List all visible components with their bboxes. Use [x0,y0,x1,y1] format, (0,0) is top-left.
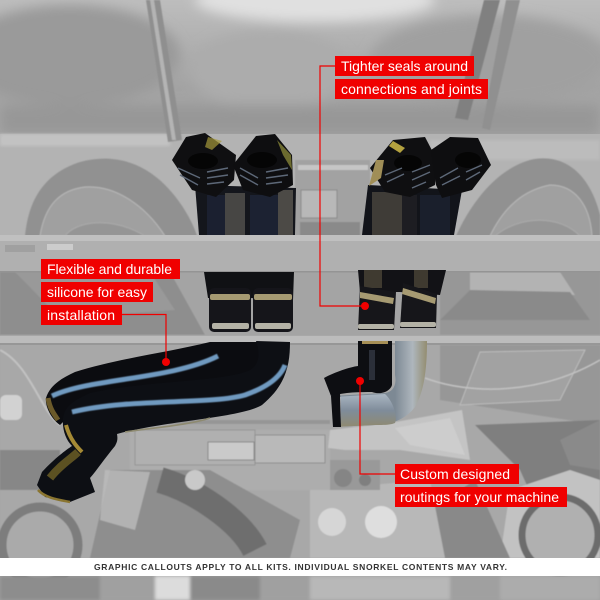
callout: flexible silicone [41,259,180,366]
right snorkel lower pipes and couplers [358,270,446,330]
callout: custom routings: Custom designed [400,466,510,482]
silicone intake tubes left [37,341,290,502]
roll cage bars [146,0,520,142]
horizontal cross bar with sticker [0,235,600,272]
left snorkel pipes upper [195,185,296,235]
bottom background strip details [0,576,600,600]
callout: custom routings [356,377,567,507]
leader line to coupler [320,66,369,310]
background photo: windshield view and foliage [0,0,600,238]
callout: flexible silicone: Flexible and durable [47,261,172,277]
right snorkel head 1 [369,137,437,197]
left seat [25,159,197,236]
lower seat area between bars [0,272,600,337]
engine bay background [0,335,600,583]
lower cross bar [0,336,600,345]
black elbow tube right [324,341,392,427]
heat shield diamond plate [328,410,470,460]
left snorkel lower pipes and couplers [204,272,294,332]
callout: custom routings: routings for your machine [400,489,559,505]
leader line to elbow [356,377,395,474]
silver heat-wrapped tube [332,341,427,427]
right snorkel head 2 [431,137,491,198]
callout: tighter seals: Tighter seals around [341,58,468,74]
leader line to tube [122,314,170,366]
callout: tighter seals: connections and joints [341,81,482,97]
right seat [456,158,600,236]
callout: flexible silicone: installation [47,307,115,323]
right snorkel pipes upper [362,185,462,235]
disclaimer text: GRAPHIC CALLOUTS APPLY TO ALL KITS. INDIVIDUAL SNORKEL CONTENTS MAY VARY. [94,562,507,572]
left snorkel head 1 [172,133,236,197]
callout: tighter seals [320,56,488,310]
dashboard centre panel [295,160,370,236]
photo label strip [0,558,600,576]
callout: flexible silicone: silicone for easy [47,284,147,300]
left snorkel head 2 [233,134,293,197]
